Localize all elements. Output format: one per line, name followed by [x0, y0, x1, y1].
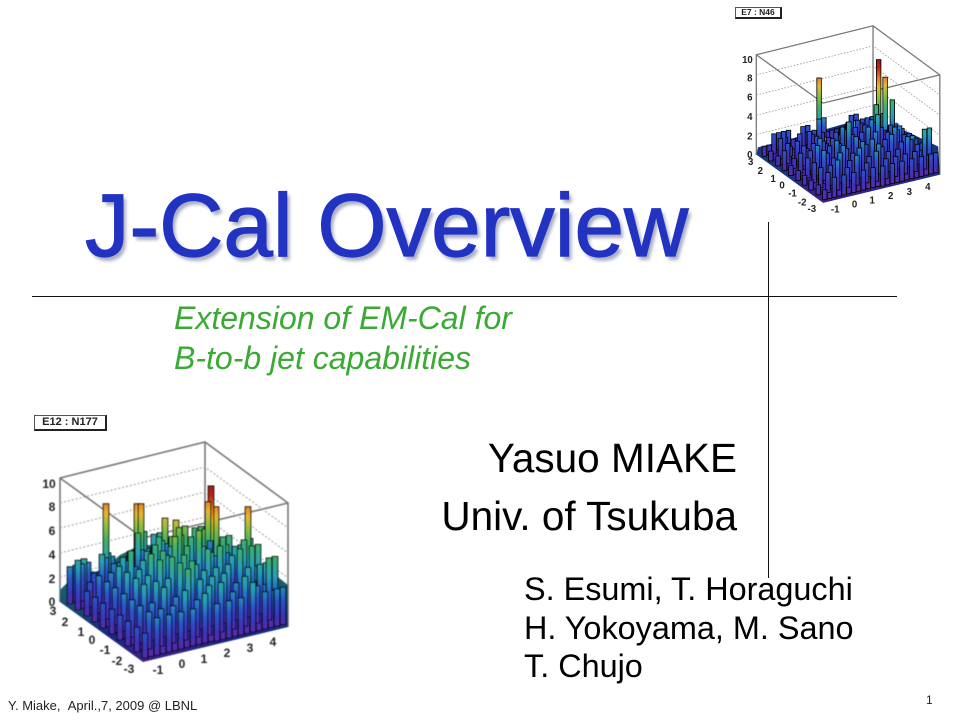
- collaborators: [524, 571, 854, 684]
- subtitle: B-to-b jet capabilities: [174, 340, 471, 376]
- footer: author and date: Y. Miake, April.,7, 2009 @ LBNL: [8, 698, 197, 713]
- collaborators: S. Esumi, T. Horaguchi: [524, 571, 853, 607]
- label: E12 N177: [34, 415, 107, 431]
- plot: E7 N46: [742, 26, 940, 216]
- divider: vertical line: [768, 222, 769, 578]
- subtitle: Extension of EM-Cal for: [174, 300, 512, 336]
- label: E7 N46: [735, 7, 782, 19]
- affiliation: Univ. of Tsukuba: [441, 493, 737, 539]
- collaborators: H. Yokoyama, M. Sano: [524, 610, 854, 646]
- label: E12 N177: E12 : N177: [42, 416, 98, 428]
- collaborators: T. Chujo: [524, 648, 643, 684]
- divider: horizontal line: [32, 296, 897, 297]
- title: J-Cal Overview: [85, 175, 688, 275]
- page number: 1: [926, 693, 933, 707]
- plot: E12 N177: [42, 442, 288, 677]
- label: E7 N46: E7 : N46: [741, 7, 775, 17]
- subtitle: [174, 300, 513, 376]
- author name: Yasuo MIAKE: [488, 435, 737, 481]
